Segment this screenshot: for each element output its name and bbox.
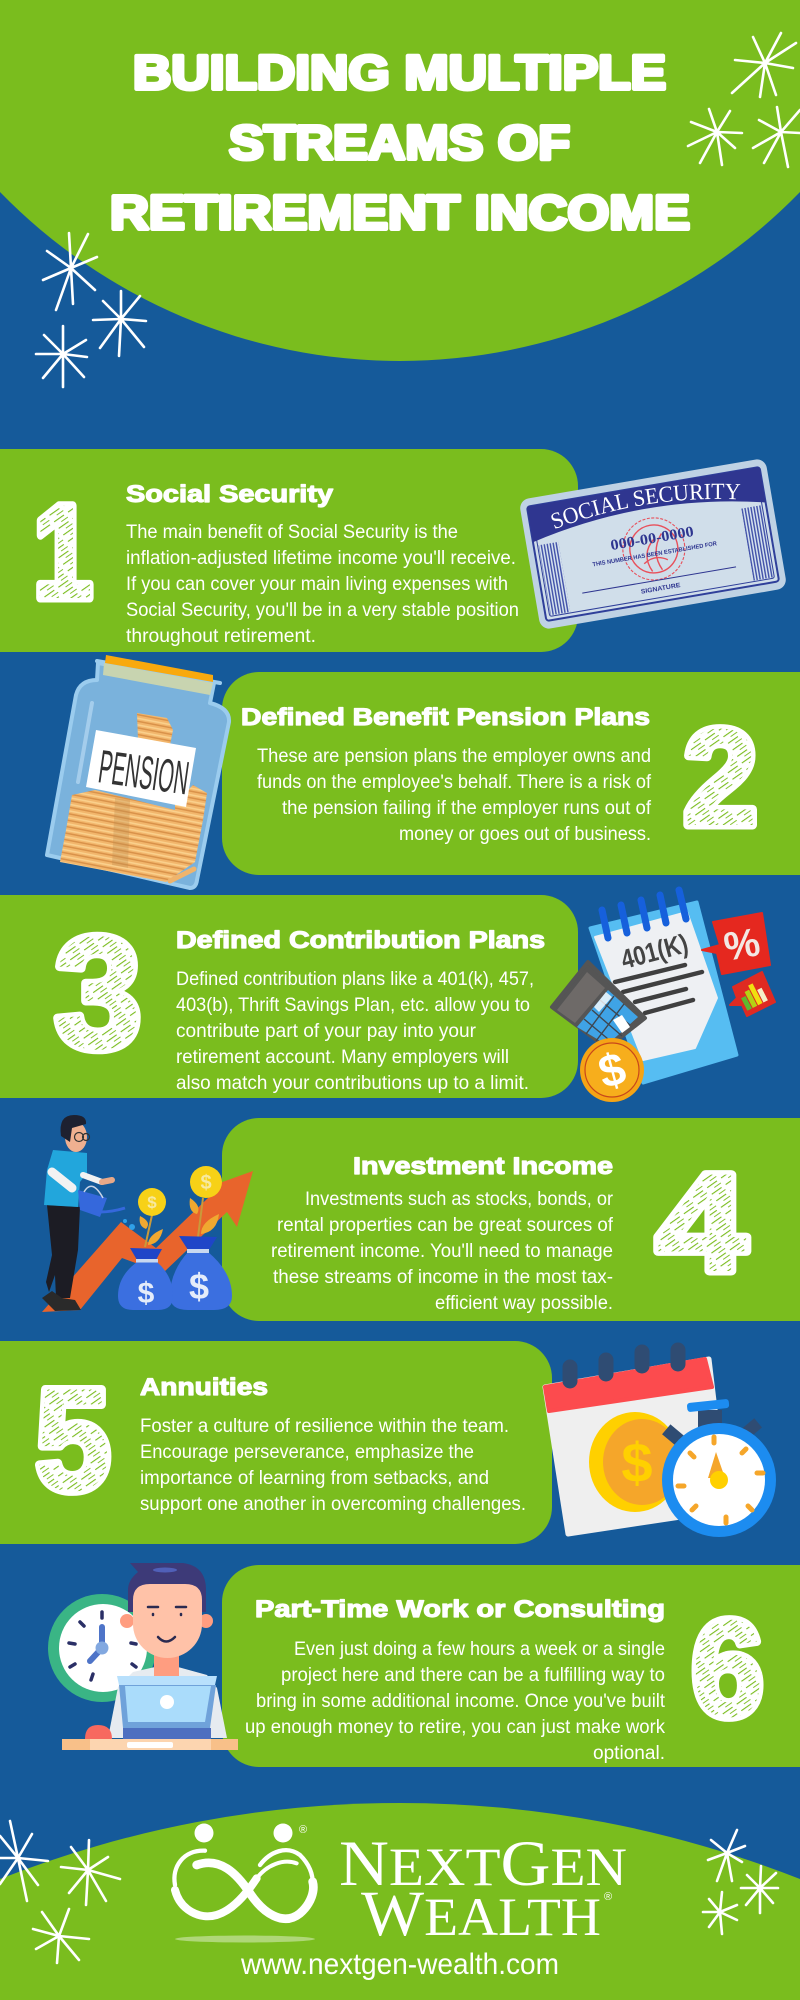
chart bubble: [730, 972, 775, 1016]
eyes and mouth: [148, 1607, 186, 1642]
title: BUILDING MULTIPLE: [133, 47, 666, 100]
calendar tabs: [570, 1350, 678, 1381]
heading: part-time: Part-Time Work or Consulting: [255, 1596, 665, 1623]
panel 3: defined contribution plans: [0, 895, 578, 1098]
money bag right: $: [189, 1266, 209, 1307]
money bag left: [118, 1248, 173, 1310]
spiral rings: [602, 890, 686, 938]
body text 3: retirement account. Many employers will: [176, 1047, 509, 1068]
body text 4: [271, 1189, 614, 1314]
decorative stars top left: [36, 233, 146, 387]
title: RETIREMENT INCOME: [110, 187, 690, 240]
darker coin column: [112, 798, 130, 868]
face: [133, 1584, 202, 1658]
head: [61, 1115, 90, 1152]
mouse: [85, 1725, 112, 1739]
jar seal band: [103, 663, 213, 695]
401k label: 401(K): [618, 928, 691, 975]
body text 4: efficient way possible.: [435, 1293, 613, 1314]
coin pile: [60, 785, 207, 882]
arms: [52, 1172, 112, 1188]
money bag right: [170, 1236, 232, 1310]
body text 6: [245, 1639, 666, 1764]
money bag left: $: [138, 1277, 155, 1310]
numeral 3: 3: [54, 903, 142, 1082]
body text 5: [140, 1416, 526, 1515]
body text 6: up enough money to retire, you can just make work: [245, 1717, 665, 1738]
icon: social security card: [520, 459, 786, 629]
body text 2: [257, 746, 652, 845]
panel 4: investment income: [222, 1118, 800, 1321]
neck: [154, 1650, 179, 1677]
body text 4: rental properties can be great sources of: [277, 1215, 614, 1236]
header arc: [0, 0, 800, 361]
coin tower: [137, 713, 173, 745]
icon: social security card: THIS NUMBER HAS BEEN ESTABLISHED FOR: [592, 541, 718, 568]
percent bubble: %: [721, 920, 763, 970]
coins: [138, 1166, 222, 1216]
body text 5: Foster a culture of resilience within the team.: [140, 1416, 509, 1437]
logo wordmark: NEXTGEN: [339, 1828, 627, 1900]
body text 1: If you can cover your main living expenses with: [126, 574, 508, 595]
body text 6: optional.: [593, 1743, 665, 1764]
icon: social security card: SOCIAL SECURITY: [551, 484, 740, 528]
body text 5: support one another in overcoming challenges.: [140, 1494, 526, 1515]
jar lid: [105, 655, 213, 682]
hair: [128, 1563, 206, 1612]
title: [110, 47, 690, 240]
logo mark: [174, 1824, 315, 1942]
calendar header: [545, 1359, 712, 1411]
panel 6 background: [222, 1565, 800, 1767]
panel 1: social security: [0, 449, 578, 652]
icon: social security card: 000-00-0000: [609, 524, 695, 554]
desk: [62, 1739, 238, 1750]
body text 6: bring in some additional income. Once you've built: [256, 1691, 666, 1712]
body text 5: importance of learning from setbacks, and: [140, 1468, 489, 1489]
website url: www.nextgen-wealth.com: [240, 1948, 559, 1981]
loose coin: [170, 869, 194, 881]
ears: [120, 1614, 134, 1628]
icon: man at laptop with clock: [48, 1563, 238, 1750]
panel 2: defined benefit pension plans: [222, 672, 800, 875]
shirt: [44, 1150, 87, 1207]
icon: pension jar: [47, 655, 229, 888]
jar lip: [97, 661, 220, 683]
wall clock: [48, 1594, 156, 1702]
panel 5: annuities: [0, 1341, 552, 1544]
icon: 401k notebook: [552, 890, 775, 1102]
body text 3: 403(b), Thrift Savings Plan, etc. allow you to: [176, 995, 530, 1016]
body text 1: Social Security, you'll be in a very stable position: [126, 600, 519, 621]
coin: [589, 1412, 681, 1512]
panel 3 background: [0, 895, 578, 1098]
shoe: [42, 1291, 81, 1311]
body text 2: money or goes out of business.: [399, 824, 651, 845]
body text 4: these streams of income in the most tax-: [273, 1267, 613, 1288]
decorative stars bottom left: [0, 1821, 120, 1963]
coins: $: [147, 1193, 157, 1212]
icon: social security card: SIGNATURE: [640, 582, 682, 596]
paper lines: [615, 965, 702, 1013]
dollar coin: $: [593, 1042, 631, 1098]
numeral 6: 6: [691, 1592, 764, 1746]
body text 4: retirement income. You'll need to manage: [271, 1241, 613, 1262]
numeral 4: 4: [656, 1144, 747, 1301]
panel 1 background: [0, 449, 578, 652]
percent bubble: [702, 913, 770, 974]
body text 6: Even just doing a few hours a week or a single: [294, 1639, 665, 1660]
logo wordmark: WEALTH: [361, 1878, 601, 1950]
numeral 2: 2: [683, 701, 758, 855]
plants: [140, 1198, 219, 1247]
logo wordmark: [339, 1828, 627, 1950]
panel 4 background: [222, 1118, 800, 1321]
logo mark: ®: [299, 1824, 307, 1836]
icon: man growing investments: [42, 1115, 253, 1312]
coins: $: [200, 1172, 212, 1194]
icon: calendar and stopwatch: [545, 1350, 776, 1537]
body text 3: contribute part of your pay into your: [176, 1021, 477, 1042]
body text 6: project here and there can be a fulfilling way to: [281, 1665, 665, 1686]
watering can: [78, 1186, 135, 1230]
decorative stars bottom right: [703, 1830, 778, 1934]
notebook back: [590, 902, 737, 1083]
calendar page: [545, 1359, 727, 1534]
jar highlight: [78, 703, 92, 782]
jar glass: [47, 663, 229, 888]
stopwatch: [662, 1399, 776, 1537]
paper: [595, 912, 717, 1060]
numeral 1: 1: [33, 478, 93, 627]
icon: pension jar: PENSION: [96, 739, 192, 804]
body text 1: throughout retirement.: [126, 626, 316, 647]
body text 5: Encourage perseverance, emphasize the: [140, 1442, 474, 1463]
body text 4: Investments such as stocks, bonds, or: [305, 1189, 614, 1210]
heading: defined benefit: Defined Benefit Pension Plans: [241, 704, 650, 731]
logo wordmark: ®: [604, 1891, 612, 1903]
body text 3: also match your contributions up to a limit.: [176, 1073, 529, 1094]
body text 2: funds on the employee's behalf. There is a risk of: [257, 772, 652, 793]
growth arrow: [42, 1171, 253, 1312]
dollar coin: [580, 1038, 644, 1102]
laptop: [117, 1676, 217, 1739]
body text 1: The main benefit of Social Security is the: [126, 522, 458, 543]
legs: [46, 1205, 80, 1298]
coin: $: [621, 1431, 653, 1494]
heading: social security: Social Security: [126, 481, 334, 508]
hair highlight: [153, 1568, 177, 1572]
panel 5 background: [0, 1341, 552, 1544]
heading: investment income: Investment Income: [353, 1153, 613, 1180]
body text 3: Defined contribution plans like a 401(k), 457,: [176, 969, 534, 990]
body text 3: [176, 969, 534, 1094]
numeral 5: 5: [35, 1358, 111, 1521]
body text 1: inflation-adjusted lifetime income you'll receive.: [126, 548, 516, 569]
panel 2 background: [222, 672, 800, 875]
body text 1: [126, 522, 519, 647]
decorative stars top right: [688, 33, 800, 167]
footer arc: [0, 1803, 800, 2000]
title: STREAMS OF: [229, 117, 570, 170]
panel 6: part-time work: [222, 1565, 800, 1767]
body text 2: These are pension plans the employer owns and: [257, 746, 651, 767]
shirt: [108, 1667, 227, 1738]
pension label: [86, 730, 196, 807]
heading: defined contribution: Defined Contribution Plans: [176, 927, 545, 954]
heading: annuities: Annuities: [140, 1374, 268, 1401]
body text 2: the pension failing if the employer runs out of: [282, 798, 652, 819]
calculator: [552, 962, 645, 1048]
